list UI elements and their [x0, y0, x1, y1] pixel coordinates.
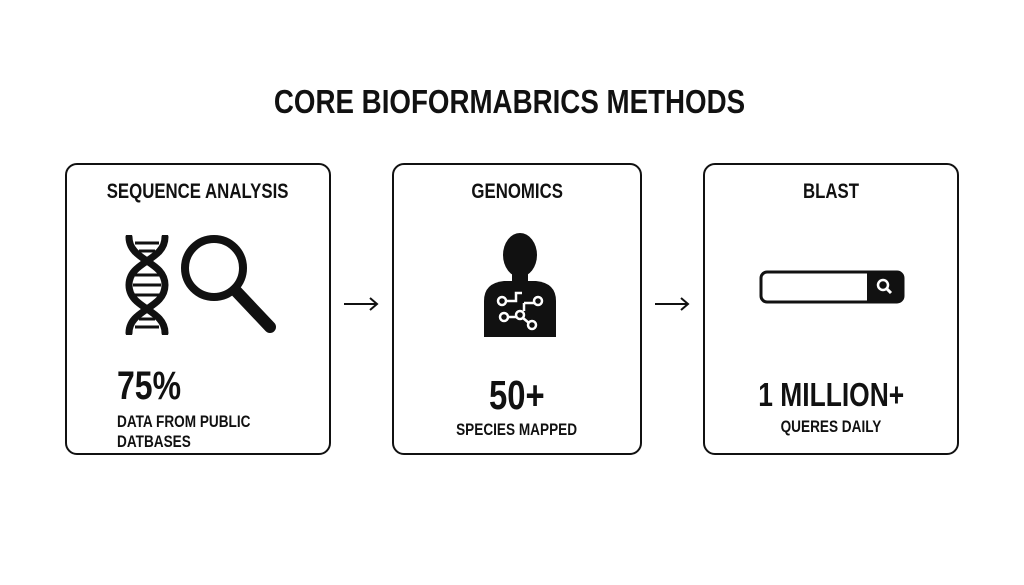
icon: search bar [760, 270, 904, 304]
stat label: QUERES DAILY [781, 417, 881, 436]
arrow 2 [655, 297, 690, 311]
icon: person with network [484, 233, 556, 337]
stat: 75% [117, 364, 181, 408]
stat: 50+ [489, 372, 545, 418]
heading: SEQUENCE ANALYSIS [107, 180, 289, 203]
icon: dna and magnifier [126, 235, 276, 335]
heading: GENOMICS [471, 180, 563, 203]
title: CORE BIOFORMABRICS METHODS [273, 83, 745, 120]
panel: blast [703, 163, 959, 455]
stat label: DATA FROM PUBLIC [117, 412, 250, 431]
stat label: DATBASES [117, 432, 191, 451]
stat label: SPECIES MAPPED [457, 420, 577, 439]
stat: 1 MILLION+ [758, 376, 904, 413]
stat label [117, 412, 250, 451]
arrow 1 [344, 297, 378, 311]
panel: genomics [392, 163, 642, 455]
heading: BLAST [803, 180, 859, 203]
panel: sequence analysis [65, 163, 331, 455]
